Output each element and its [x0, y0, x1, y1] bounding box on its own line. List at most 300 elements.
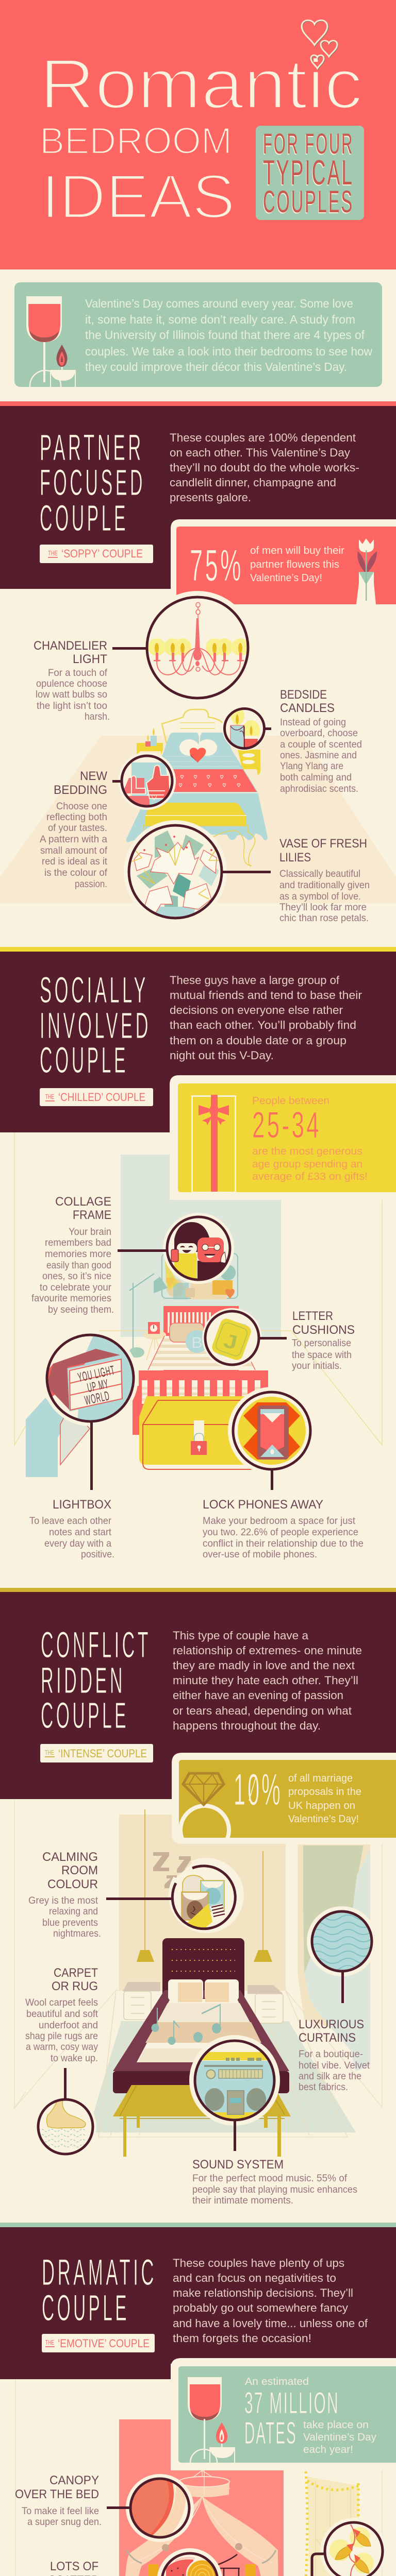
label: bedside candles: both calming and: [280, 772, 352, 783]
description: relationship of extremes- one minute: [173, 1644, 362, 1657]
nightstands and lamps: [142, 2564, 260, 2576]
stat text: each year!: [303, 2444, 353, 2455]
label: carpet or rug: underfoot and: [39, 2020, 98, 2031]
stat text: of all marriage: [288, 1773, 353, 1784]
label: vase of fresh lilies: chic than rose petals.: [279, 912, 369, 924]
callout: collage frame: [31, 1195, 234, 1315]
couple badge: THE: [45, 2338, 54, 2346]
connector: [112, 780, 122, 783]
bed pillows: [164, 733, 232, 756]
description: them forgets the occasion!: [173, 2332, 311, 2345]
description: probably go out somewhere fancy: [173, 2301, 349, 2314]
stat text: age group spending an: [252, 1159, 362, 1170]
label: carpet or rug: Wool carpet feels: [25, 1997, 98, 2008]
description: and have a lovely time... unless one of: [173, 2317, 368, 2330]
label: bedside candles: Instead of going: [280, 717, 346, 728]
heading: [40, 970, 151, 1081]
label: collage frame: remembers bad: [45, 1237, 111, 1248]
label: canopy over the bed: a super snug den.: [27, 2516, 102, 2528]
label: lock phones away: you two. 22.6% of people experience: [203, 1527, 358, 1538]
callout: sound system: [189, 2035, 357, 2206]
stat text: [244, 2376, 376, 2455]
label: sound system: SOUND SYSTEM: [192, 2158, 284, 2172]
bed frame: [113, 1990, 289, 2071]
stat text: are the most generous: [252, 1146, 362, 1157]
description: make relationship decisions. They’ll: [173, 2286, 353, 2299]
title: BEDROOM: [40, 121, 232, 162]
stat text: [288, 1773, 361, 1825]
label: calming room colour: [28, 1850, 101, 1939]
label: luxurious curtains: and silk are the: [299, 2071, 361, 2082]
connector: [259, 1337, 287, 1340]
stat text: People between: [252, 1095, 329, 1107]
label: bedside candles: Ylang Ylang are: [280, 760, 343, 772]
panel: proposal statistic: 10%: [234, 1765, 283, 1815]
headboard studs: [180, 722, 215, 729]
callout: luxurious curtains: [299, 1906, 377, 2093]
music notes: [152, 2004, 221, 2045]
label: vase of fresh lilies: They’ll look far more: [279, 902, 367, 913]
connector: [234, 2120, 236, 2151]
title: Romantic: [40, 45, 362, 124]
headboard: [162, 1938, 244, 2000]
subtitle badge: [256, 126, 364, 220]
icon: lightbox sign: UP MY: [86, 1377, 110, 1395]
description: night out this V-Day.: [170, 1049, 274, 1062]
description: candlelit dinner, champagne and: [170, 476, 336, 489]
label: new bedding: red is ideal as it: [42, 856, 108, 867]
icon: letter J cushion: [212, 1319, 251, 1360]
headboard: [162, 709, 222, 743]
label: chandelier light: LIGHT: [73, 652, 107, 666]
panel: socially involved header: INVOLVED: [40, 1006, 151, 1046]
label: vase of fresh lilies: and traditionally given: [279, 879, 370, 891]
callout: chandelier light: [34, 591, 254, 722]
couple badge: [42, 2334, 155, 2352]
label: luxurious curtains: For a boutique-: [299, 2048, 363, 2060]
description: they’ll no doubt do the whole works-: [170, 461, 359, 474]
label: calming room colour: ROOM: [61, 1863, 98, 1877]
label: new bedding: Choose one: [56, 801, 107, 812]
callout: calming room colour: [28, 1850, 241, 1939]
strip: [0, 401, 396, 406]
description: them on a double date or a group: [170, 1034, 346, 1047]
icon: chandelier: [148, 603, 249, 675]
floor lamp: [129, 1274, 168, 1358]
stat number: [234, 1765, 283, 1815]
icon: lightbox sign: YOU LIGHT: [76, 1363, 117, 1385]
label: canopy over the bed: To make it feel like: [22, 2505, 99, 2517]
stat text: proposals in the: [288, 1786, 361, 1798]
label: lightbox: notes and start: [49, 1527, 112, 1538]
description: These guys have a large group of: [170, 974, 340, 987]
couple badge: THE: [48, 549, 58, 557]
icon: sleeping z letters: [153, 1852, 191, 1888]
heading: RIDDEN: [41, 1660, 125, 1701]
panel: partner focused header: PARTNER: [40, 428, 144, 468]
room illustration: chilled bed: [133, 1306, 268, 1469]
label: canopy over the bed: [15, 2473, 102, 2528]
label: new bedding: [40, 769, 108, 890]
canopy: [124, 2470, 278, 2576]
mattress: [137, 1999, 267, 2062]
heading: [42, 2252, 157, 2329]
label: lock phones away: LOCK PHONES AWAY: [203, 1498, 323, 1512]
label: collage frame: memories more: [45, 1248, 111, 1260]
callout: lock phones away: [203, 1387, 364, 1560]
label: luxurious curtains: best fabrics.: [299, 2081, 348, 2093]
callout: carpet or rug: [25, 1966, 98, 2158]
perspective lines: [14, 1799, 382, 2108]
icon: three hearts: [302, 20, 337, 69]
label: carpet or rug: [25, 1966, 98, 2064]
icon: thumbs up bedding: [124, 762, 169, 805]
icon: candles: [230, 710, 260, 747]
room backdrop: coral wall: [15, 2379, 382, 2576]
label: letter cushions: [292, 1309, 355, 1371]
label: chandelier light: the light isn’t too: [37, 700, 107, 711]
label: lock phones away: conflict in their relationship due to the: [203, 1538, 364, 1549]
icon: fairy light bulbs: [329, 2524, 374, 2576]
pillows: B: [191, 1334, 203, 1351]
description: [173, 2257, 368, 2345]
label: collage frame: favourite memories: [31, 1293, 111, 1304]
icon: letter J cushion: J: [222, 1330, 239, 1354]
label: collage frame: to celebrate your: [40, 1282, 111, 1293]
label: collage frame: by seeing them.: [48, 1304, 114, 1315]
panel: conflict ridden header: [0, 1592, 396, 1799]
pillows: [168, 1979, 239, 2002]
couple badge: THE: [45, 1749, 54, 1756]
couple badge: [40, 545, 153, 563]
label: calming room colour: nightmares.: [53, 1928, 101, 1939]
connector: [312, 2554, 325, 2576]
label: calming room colour: Grey is the most: [28, 1895, 98, 1906]
label: collage frame: Your brain: [69, 1226, 111, 1238]
heading: COUPLE: [42, 2288, 129, 2329]
stat text: [252, 1095, 368, 1182]
panel: socially involved header: SOCIALLY: [40, 970, 148, 1011]
strip: [0, 1588, 396, 1592]
collage frame on wall: [162, 1253, 238, 1299]
label: carpet or rug: CARPET: [54, 1966, 98, 1980]
room backdrop: mint wall and perspective lines: [14, 1132, 382, 1445]
couple badge: ‘SOPPY’ COUPLE: [61, 547, 143, 560]
label: vase of fresh lilies: [279, 837, 370, 924]
label: new bedding: small amount of: [40, 845, 108, 856]
panel: partner focused header: [0, 406, 396, 589]
label: bedside candles: a couple of scented: [280, 739, 362, 750]
label: canopy over the bed: CANOPY: [50, 2473, 99, 2487]
icon: canopy fabric: [132, 2480, 186, 2536]
panel: introduction: [14, 282, 382, 387]
label: chandelier light: [34, 639, 110, 722]
label: carpet or rug: OR RUG: [52, 1979, 98, 1993]
rug: [88, 2021, 356, 2132]
description: This type of couple have a: [173, 1629, 308, 1642]
description: or tears ahead, depending on what: [173, 1704, 352, 1717]
label: bedside candles: overboard, choose: [280, 727, 358, 739]
side table and clock: [143, 1322, 166, 1360]
yellow throw: [145, 803, 246, 826]
couple badge: [40, 1744, 153, 1762]
label: new bedding: of your tastes.: [48, 822, 107, 834]
description: presents galore.: [170, 491, 251, 504]
room backdrop: beige wall, curtain and rug: [14, 1799, 382, 2137]
icon: tulip in vase: [356, 538, 377, 604]
label: collage frame: [31, 1195, 114, 1315]
label: lock phones away: Make your bedroom a space for just: [203, 1515, 356, 1527]
icon: boombox: [196, 2052, 273, 2119]
label: new bedding: reflecting both: [46, 811, 107, 823]
label: letter cushions: To personalise: [292, 1337, 351, 1349]
label: lock phones away: over-use of mobile phones.: [203, 1549, 317, 1560]
stat text: DATES: [244, 2416, 297, 2450]
label: chandelier light: opulence choose: [36, 678, 107, 689]
label: calming room colour: blue prevents: [42, 1917, 98, 1928]
label: sound system: [192, 2158, 357, 2206]
headboard: [163, 1306, 239, 1370]
strip: [0, 947, 396, 952]
label: collage frame: FRAME: [73, 1208, 111, 1222]
couple badge: THE: [45, 1093, 54, 1100]
label: collage frame: easily than good: [46, 1260, 111, 1271]
room illustration: emotive bed: [118, 2554, 286, 2576]
heading: COUPLE: [40, 498, 128, 539]
panel: proposal statistic: [172, 1753, 396, 1844]
intro text: it, some hate it, some don’t really care. A study from: [85, 313, 355, 326]
title: IDEAS: [41, 161, 235, 231]
description: than each other. You’ll probably find: [170, 1019, 356, 1031]
label: sound system: For the perfect mood music. 55% of: [192, 2173, 348, 2184]
panel: flower statistic: [171, 519, 396, 604]
connector: [107, 2506, 130, 2509]
label: letter cushions: the space with: [292, 1349, 352, 1361]
label: scatter cushions: [29, 2560, 102, 2576]
couple badge: ‘EMOTIVE’ COUPLE: [58, 2337, 150, 2350]
label: lightbox: positive.: [81, 1549, 114, 1560]
connector: [112, 647, 146, 650]
couple badge: [40, 1088, 153, 1106]
title: [40, 45, 362, 231]
stat text: Valentine’s Day!: [250, 572, 322, 584]
label: vase of fresh lilies: as a symbol of love.: [279, 891, 361, 902]
label: calming room colour: CALMING: [42, 1850, 98, 1864]
description: they are madly in love and the next: [173, 1659, 355, 1672]
label: vase of fresh lilies: Classically beautiful: [279, 868, 360, 879]
intro text: [85, 297, 373, 374]
label: lightbox: To leave each other: [29, 1515, 111, 1527]
label: luxurious curtains: hotel vibe. Velvet: [299, 2060, 370, 2071]
label: bedside candles: CANDLES: [280, 701, 335, 715]
icon: wine glass and candle: [26, 296, 76, 387]
pillows: [170, 1323, 208, 1353]
stat text: of men will buy their: [250, 545, 344, 556]
label: lock phones away: [203, 1498, 364, 1560]
callout: canopy over the bed: [15, 2473, 194, 2542]
trunk with lock: [139, 1396, 253, 1469]
stat text: average of £33 on gifts!: [252, 1171, 368, 1182]
icon: lightbox sign: WORLD: [84, 1388, 111, 1408]
room illustration: intense bed: [113, 1938, 291, 2157]
label: new bedding: BEDDING: [54, 783, 107, 797]
stat text: UK happen on: [288, 1800, 355, 1811]
heading: COUPLE: [41, 1696, 129, 1736]
blue armchair shape: [26, 1398, 90, 1477]
stat text: An estimated: [245, 2376, 309, 2387]
description: [170, 974, 362, 1062]
connector: [90, 1422, 93, 1490]
label: luxurious curtains: LUXURIOUS: [299, 2018, 364, 2031]
heading: [41, 1625, 151, 1736]
description: on each other. This Valentine’s Day: [170, 446, 351, 459]
heart: [190, 748, 206, 763]
icon: silk waves: [314, 1912, 370, 1970]
right nightstand: [238, 750, 260, 775]
callout: scatter cushions: [51, 2548, 223, 2576]
icon: couple portrait: [171, 1222, 226, 1279]
label: carpet or rug: to wake up.: [51, 2053, 98, 2064]
stat number: 75%: [190, 541, 243, 590]
label: chandelier light: For a touch of: [48, 667, 108, 679]
panel: partner focused header: FOCUSED: [40, 463, 145, 503]
label: new bedding: is the colour of: [44, 867, 108, 878]
label: chandelier light: low watt bulbs so: [36, 689, 107, 700]
bed foot bench: [113, 2085, 291, 2157]
panel: dates statistic: [171, 2358, 396, 2476]
label: carpet or rug: beautiful and soft: [26, 2008, 98, 2020]
stat text: [250, 545, 344, 584]
description: mutual friends and tend to base their: [170, 989, 362, 1002]
label: letter cushions: your initials.: [292, 1360, 342, 1371]
heading: [40, 428, 145, 539]
label: sound system: their intimate moments.: [192, 2195, 293, 2206]
panel: socially involved header: [0, 952, 396, 1132]
connector: [64, 2068, 67, 2100]
strip: [0, 2223, 396, 2227]
window with fairy lights: [304, 2471, 359, 2576]
label: new bedding: passion.: [75, 878, 107, 890]
panel: age statistic: [170, 1075, 396, 1200]
label: chandelier light: harsh.: [85, 711, 110, 722]
description: happens throughout the day.: [173, 1719, 321, 1732]
duvet stitching: [160, 756, 239, 767]
label: bedside candles: BEDSIDE: [280, 688, 327, 702]
panel: header: [0, 0, 396, 269]
bed base and slats: [133, 1370, 268, 1435]
intro text: couples. We take a look into their bedrooms to see how: [85, 345, 373, 358]
description: [170, 431, 359, 504]
label: vase of fresh lilies: VASE OF FRESH: [279, 837, 367, 851]
label: vase of fresh lilies: LILIES: [279, 851, 311, 865]
label: collage frame: ones, so it’s nice: [42, 1270, 111, 1282]
callout: fairy lights: [310, 2518, 384, 2576]
room illustration: soppy bed: [126, 709, 268, 866]
label: bedside candles: aphrodisiac scents.: [280, 783, 358, 794]
callout: bedside candles: [222, 688, 362, 794]
stat text: Valentine’s Day: [303, 2432, 376, 2443]
label: calming room colour: COLOUR: [47, 1877, 98, 1891]
icon: colour swatches: [181, 1875, 225, 1928]
icon: phone with cross: [238, 1397, 306, 1465]
label: chandelier light: CHANDELIER: [34, 639, 107, 653]
label: calming room colour: relaxing and: [49, 1906, 98, 1917]
label: collage frame: COLLAGE: [55, 1195, 111, 1209]
icon: foot on carpet: [39, 2101, 86, 2147]
callout: vase of fresh lilies: [124, 820, 370, 924]
stat text: partner flowers this: [250, 559, 339, 570]
heading: COUPLE: [40, 1040, 128, 1081]
description: decisions on everyone else rather: [170, 1004, 343, 1016]
label: bedside candles: [280, 688, 362, 794]
label: carpet or rug: a warm, cosy way: [26, 2041, 98, 2053]
intro text: the University of Illinois found that there are 4 types of: [85, 328, 365, 342]
label: lightbox: LIGHTBOX: [53, 1498, 111, 1512]
intro text: they could improve their décor this Valentine’s Day.: [85, 360, 347, 374]
label: sound system: people say that playing music enhances: [192, 2184, 357, 2195]
label: new bedding: A pattern with a: [40, 834, 107, 845]
icon: diamond ring: [179, 1772, 231, 1838]
nightstands: [123, 1982, 283, 2023]
description: [173, 1629, 362, 1732]
description: either have an evening of passion: [173, 1689, 343, 1702]
description: These couples have plenty of ups: [173, 2257, 344, 2269]
icon: lilies: [132, 831, 219, 917]
connector: [265, 727, 271, 730]
panel: conflict ridden header: CONFLICT: [41, 1625, 151, 1666]
connector: [341, 1972, 344, 2003]
connector: [106, 1897, 171, 1900]
blanket: [145, 769, 258, 793]
stat text: Valentine’s Day!: [288, 1814, 359, 1825]
description: minute they hate each other. They’ll: [173, 1674, 358, 1687]
stat text: 25-34: [252, 1105, 321, 1146]
bed skirt: [126, 751, 268, 842]
couple badge: ‘CHILLED’ COUPLE: [58, 1091, 145, 1104]
room backdrop: floor one: [0, 736, 396, 903]
headboard bars: [215, 2554, 240, 2576]
label: canopy over the bed: OVER THE BED: [15, 2487, 99, 2501]
label: luxurious curtains: CURTAINS: [299, 2031, 356, 2045]
label: bedside candles: ones. Jasmine and: [280, 750, 357, 761]
label: scatter cushions: LOTS OF: [50, 2560, 98, 2573]
stat text: take place on: [303, 2419, 369, 2431]
panel: dramatic couple header: [0, 2227, 396, 2379]
icon: gift box: [192, 1095, 235, 1192]
panel: dramatic couple header: DRAMATIC: [42, 2252, 157, 2293]
label: lightbox: every day with a: [44, 1538, 111, 1549]
icon: wine glass and candle: [188, 2377, 235, 2463]
callout: lightbox: [29, 1330, 138, 1560]
label: lightbox: [29, 1498, 114, 1560]
left nightstand with candles: [137, 728, 163, 755]
label: luxurious curtains: [299, 2018, 370, 2093]
mattress: [150, 1336, 254, 1370]
connector: [118, 1249, 167, 1252]
label: letter cushions: CUSHIONS: [292, 1323, 355, 1337]
callout: letter cushions: [202, 1308, 355, 1371]
lamp cords and pendant lamps: [137, 1809, 272, 1962]
intro text: Valentine’s Day comes around every year. Some love: [85, 297, 353, 310]
couple badge: ‘INTENSE’ COUPLE: [58, 1747, 147, 1760]
icon: cushions: [166, 2557, 216, 2576]
callout: new bedding: [40, 752, 176, 890]
description: and can focus on negativities to: [173, 2272, 336, 2284]
icon: lightbox sign: [48, 1336, 132, 1420]
label: letter cushions: LETTER: [292, 1309, 333, 1323]
connector: [271, 1469, 273, 1490]
connector: [222, 871, 271, 873]
